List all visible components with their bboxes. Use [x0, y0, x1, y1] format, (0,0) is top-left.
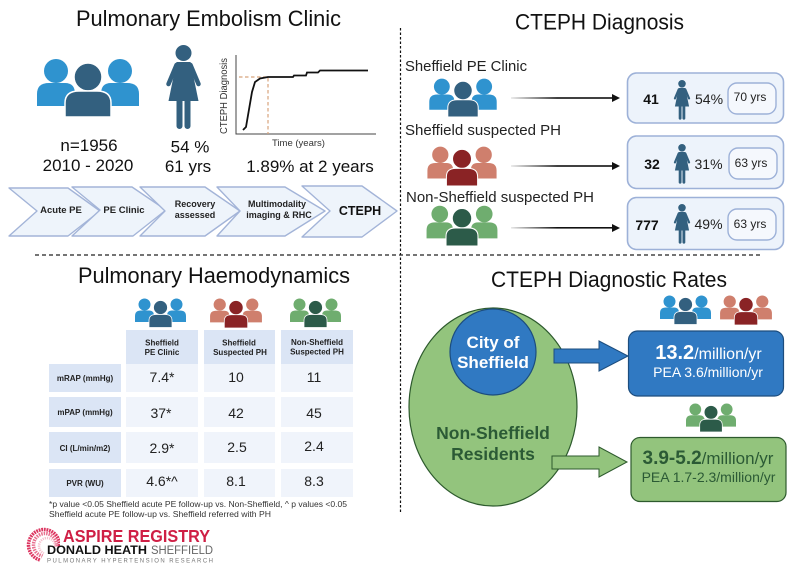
- haemodynamics table: 7.4*: [150, 369, 175, 385]
- diagram: non-Sheffield residents: Residents: [451, 444, 535, 464]
- icon: red group: [210, 299, 262, 328]
- table footnote: *p value <0.05 Sheffield acute PE follow-up vs. Non-Sheffield, ^ p values <0.05: [49, 500, 348, 509]
- logo: ASPIRE registry: SHEFFIELD: [151, 545, 213, 557]
- panel: pulmonary haemodynamics: [49, 263, 353, 519]
- rate box: non-Sheffield: [631, 438, 786, 502]
- arrow: Sheffield to rate: [554, 341, 628, 371]
- process chevrons: imaging & RHC: [246, 210, 312, 220]
- chart: CTEPH diagnosis over time: [219, 55, 376, 149]
- icon: blue group: [660, 296, 711, 324]
- icon: green group: [427, 206, 497, 246]
- haemodynamics table: [49, 330, 353, 497]
- haemodynamics table: 2.4: [304, 438, 324, 454]
- heading: CTEPH diagnosis: CTEPH Diagnosis: [515, 10, 684, 34]
- haemodynamics table: 10: [228, 369, 244, 385]
- panel: CTEPH diagnosis: [405, 10, 784, 250]
- heading: pulmonary haemodynamics: Pulmonary Haemodynamics: [78, 263, 350, 288]
- rate box: Sheffield: PEA 3.6/million/yr: [653, 364, 763, 380]
- table footnote: Sheffield acute PE follow-up vs. Sheffield referred with PH: [49, 510, 271, 519]
- haemodynamics table: 4.6*^: [146, 473, 178, 489]
- text: study period: 2010 - 2020: [43, 156, 133, 175]
- vertical divider: [400, 28, 402, 514]
- label: Non-Sheffield suspected PH: Non-Sheffield suspected PH: [406, 189, 594, 206]
- stat box: Sheffield PE Clinic: 70 yrs: [734, 90, 766, 104]
- haemodynamics table: 37*: [150, 405, 172, 421]
- icon: blue group: [135, 298, 186, 328]
- text: percent female: 54 %: [171, 138, 209, 156]
- arrow: non-Sheffield to rate: [552, 447, 627, 477]
- label: Sheffield PE Clinic: Sheffield PE Clinic: [405, 58, 527, 75]
- diagram: City of Sheffield: [450, 309, 536, 395]
- logo: ASPIRE registry: DONALD HEATH: [47, 545, 147, 557]
- haemodynamics table: 42: [228, 405, 244, 421]
- stat box: Non-Sheffield suspected PH: 49%: [694, 216, 723, 232]
- text: mean age: 61 yrs: [165, 157, 211, 176]
- heading: CTEPH diagnostic rates: CTEPH Diagnostic Rates: [491, 267, 727, 292]
- haemodynamics table: 11: [307, 369, 321, 385]
- process chevrons: CTEPH: [339, 204, 381, 218]
- haemodynamics table: Suspected PH: [290, 348, 344, 356]
- stat box: Non-Sheffield suspected PH: 777: [635, 217, 659, 233]
- icon: patient group: [37, 59, 139, 117]
- process chevrons: Recovery: [175, 199, 215, 209]
- haemodynamics table: 8.3: [304, 473, 324, 489]
- stat box: Sheffield PE Clinic: [628, 73, 784, 123]
- logo: ASPIRE registry: [28, 525, 214, 574]
- text: cohort size: n=1956: [60, 136, 118, 155]
- chart: CTEPH diagnosis over time: Time (years): [272, 138, 325, 149]
- text: incidence: 1.89% at 2 years: [246, 157, 374, 176]
- rate box: non-Sheffield: 3.9-5.2/million/yr: [643, 448, 774, 469]
- diagram: City of Sheffield: Sheffield: [457, 353, 529, 372]
- arrow: [511, 162, 620, 170]
- diagram: non-Sheffield residents: [409, 308, 577, 506]
- icon: green group: [290, 298, 341, 328]
- table footnote: [49, 500, 348, 519]
- diagram: City of Sheffield: City of: [467, 333, 520, 352]
- haemodynamics table: Sheffield: [145, 338, 179, 348]
- panel: pulmonary embolism clinic: [9, 6, 397, 237]
- process chevrons: assessed: [175, 210, 215, 220]
- haemodynamics table: CI (L/min/m2): [60, 444, 111, 453]
- process chevrons: Acute PE: [40, 205, 82, 216]
- icon: blue group: [429, 79, 497, 117]
- label: Sheffield suspected PH: Sheffield suspected PH: [405, 122, 561, 139]
- stat box: Sheffield suspected PH: 32: [644, 156, 660, 172]
- process chevrons: [9, 186, 397, 237]
- rate box: non-Sheffield: PEA 1.7-2.3/million/yr: [642, 469, 776, 485]
- icon: red group: [427, 147, 497, 186]
- haemodynamics table: 8.1: [226, 473, 246, 489]
- heading: pulmonary embolism clinic: Pulmonary Embolism Clinic: [76, 6, 341, 31]
- logo: ASPIRE registry: PULMONARY HYPERTENSION RESEARCH: [47, 558, 213, 564]
- haemodynamics table: Non-Sheffield: [291, 338, 343, 347]
- arrow: [511, 94, 620, 102]
- haemodynamics table: Suspected PH: [213, 348, 267, 357]
- arrow: [511, 224, 620, 232]
- haemodynamics table: Sheffield: [222, 338, 256, 348]
- process chevrons: Multimodality: [248, 199, 306, 209]
- chart: CTEPH diagnosis over time: CTEPH Diagnosis: [219, 58, 230, 134]
- rate box: Sheffield: [628, 331, 784, 396]
- diagram: non-Sheffield residents: Non-Sheffield: [436, 423, 550, 443]
- logo: ASPIRE registry: ASPIRE REGISTRY: [63, 526, 210, 546]
- stat box: Sheffield suspected PH: 31%: [694, 156, 723, 172]
- stat box: Sheffield PE Clinic: 54%: [695, 91, 723, 107]
- haemodynamics table: mPAP (mmHg): [57, 408, 113, 417]
- haemodynamics table: 2.5: [227, 439, 247, 455]
- stat box: Non-Sheffield suspected PH: [628, 198, 784, 250]
- haemodynamics table: PVR (WU): [66, 479, 104, 488]
- stat box: Non-Sheffield suspected PH: 63 yrs: [734, 217, 766, 231]
- haemodynamics table: mRAP (mmHg): [57, 374, 113, 383]
- rate box: Sheffield: 13.2/million/yr: [655, 342, 762, 364]
- process chevrons: PE Clinic: [103, 205, 145, 216]
- panel: CTEPH diagnostic rates: [409, 267, 786, 506]
- stat box: Sheffield suspected PH: [628, 136, 784, 188]
- stat box: Sheffield PE Clinic: 41: [643, 91, 659, 107]
- haemodynamics table: 45: [306, 405, 322, 421]
- icon: woman: [168, 45, 198, 129]
- icon: green group: [686, 404, 736, 432]
- haemodynamics table: PE Clinic: [145, 348, 180, 357]
- haemodynamics table: 2.9*: [150, 440, 175, 456]
- icon: red group: [720, 296, 772, 325]
- stat box: Sheffield suspected PH: 63 yrs: [735, 156, 767, 170]
